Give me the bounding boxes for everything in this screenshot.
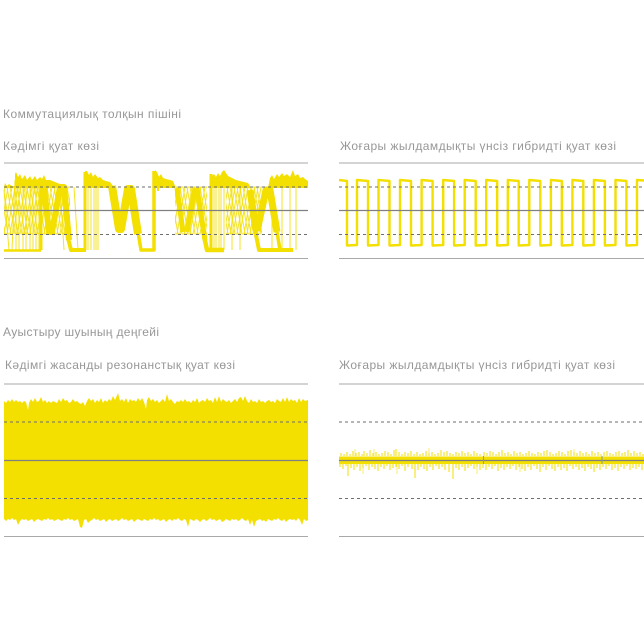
square wave chart (339, 180, 644, 246)
panel: silent hybrid power supply noise (339, 358, 644, 536)
panel: conventional power supply waveform (0, 139, 308, 258)
waveform chart (0, 170, 308, 250)
panel heading: Кәдімгі жасанды резонанстық қуат көзі (5, 358, 235, 372)
panel: conventional resonant power supply noise (4, 358, 308, 536)
infographic (3, 110, 644, 537)
noise chart (4, 393, 308, 528)
panel heading: Жоғары жылдамдықты үнсіз гибридті қуат көзі (339, 358, 615, 372)
panel heading: Жоғары жылдамдықты үнсіз гибридті қуат көзі (340, 139, 616, 153)
panel: silent hybrid power supply waveform (339, 139, 644, 258)
panel heading: Кәдімгі қуат көзі (3, 139, 99, 153)
heading: switching waveform: Коммутациялық толқын пішіні (3, 107, 181, 121)
noise chart (339, 448, 644, 479)
heading: switching noise level: Ауыстыру шуының деңгейі (3, 325, 159, 339)
